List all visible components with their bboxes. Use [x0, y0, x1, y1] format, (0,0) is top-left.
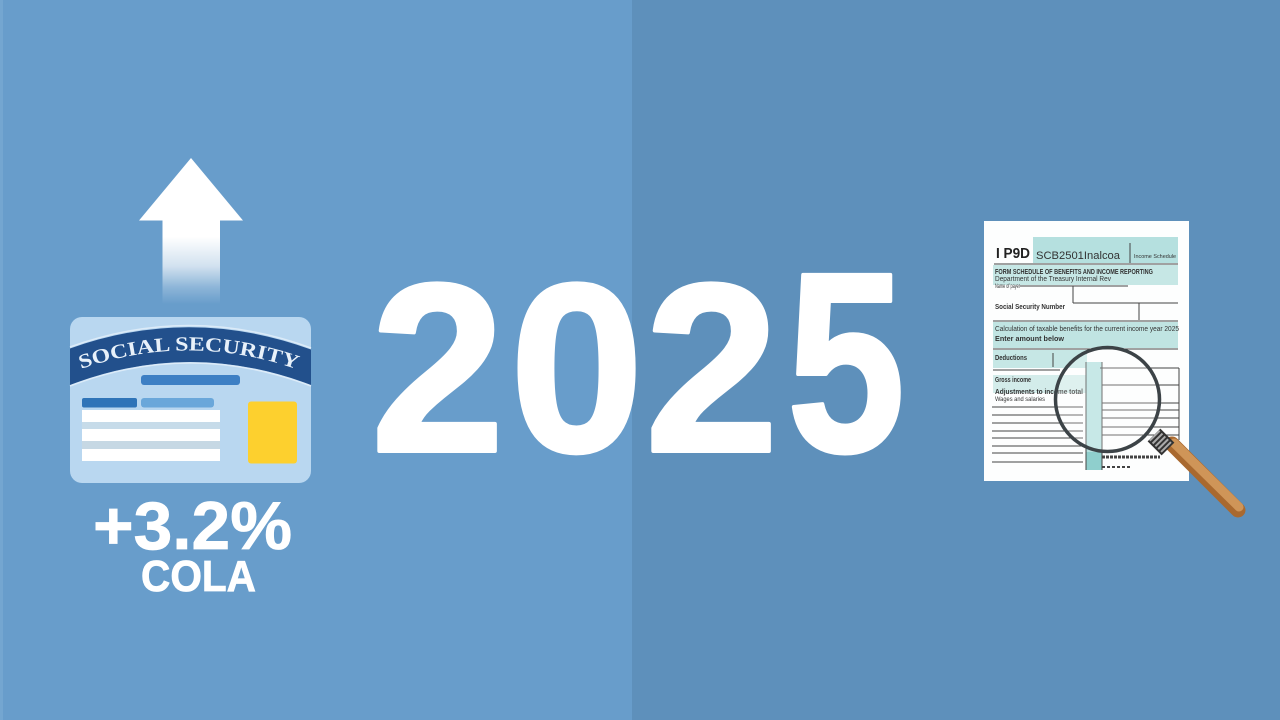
form sheet	[984, 221, 1189, 481]
panel: left background	[0, 0, 632, 720]
card line 3	[82, 449, 220, 461]
form small print: FORM SCHEDULE OF BENEFITS AND INCOME REPORTING	[995, 269, 1153, 276]
card title: SOCIAL SECURITY	[79, 337, 300, 368]
card divider band 1	[82, 422, 220, 429]
card line 1	[82, 410, 220, 422]
form small print: Social Security Number	[995, 304, 1065, 311]
card chip	[248, 402, 297, 464]
form small print: Gross income	[995, 377, 1031, 384]
form small print: Department of the Treasury Internal Rev	[995, 276, 1111, 283]
magnifier collar	[1154, 435, 1168, 449]
form band 1	[993, 265, 1178, 285]
form heading detail: SCB2501Inalcoa	[1036, 250, 1121, 262]
magnifier collar texture	[1154, 435, 1168, 449]
form band 3	[993, 350, 1087, 368]
card divider band 2	[82, 441, 220, 449]
form heading: I P9D	[996, 245, 1030, 262]
form small print: Deductions	[995, 355, 1027, 362]
form small print: Income Schedule	[1134, 254, 1176, 260]
panel: right background	[632, 0, 1280, 720]
card body	[70, 317, 311, 483]
left edge strip	[0, 0, 3, 720]
card banner	[70, 327, 311, 385]
icon: tax form with magnifying glass	[984, 221, 1239, 510]
title: year 2025: 202	[371, 234, 778, 502]
card banner bottom edge	[70, 363, 311, 386]
form rules	[992, 243, 1179, 470]
card tab light	[141, 398, 214, 408]
magnifier handle highlight	[1174, 443, 1239, 507]
form band 2	[993, 322, 1178, 348]
card top bar	[141, 375, 240, 385]
card line 2	[82, 429, 220, 441]
magnifier handle	[1172, 444, 1238, 510]
card banner top edge	[70, 325, 311, 348]
icon: social security card	[70, 317, 312, 483]
magnifier lens	[1056, 348, 1160, 452]
label: COLA: COLA	[141, 552, 256, 601]
form small print: Enter amount below	[995, 336, 1065, 343]
form column base	[1086, 452, 1102, 470]
form small print: Name of payer	[995, 284, 1020, 290]
form small print: Adjustments to income total	[995, 389, 1083, 396]
title: year 2025: 5	[787, 220, 905, 506]
form band 4	[993, 375, 1087, 393]
icon: up arrow	[139, 158, 243, 304]
form small print: Calculation of taxable benefits for the current income year 2025	[995, 326, 1179, 333]
form small print: Wages and salaries	[995, 397, 1045, 403]
stat: +3.2%: +3.2%	[93, 488, 292, 564]
card tab dark	[82, 398, 137, 408]
form column tint	[1086, 362, 1102, 470]
form header tint	[1033, 237, 1178, 263]
form small print	[995, 254, 1179, 403]
